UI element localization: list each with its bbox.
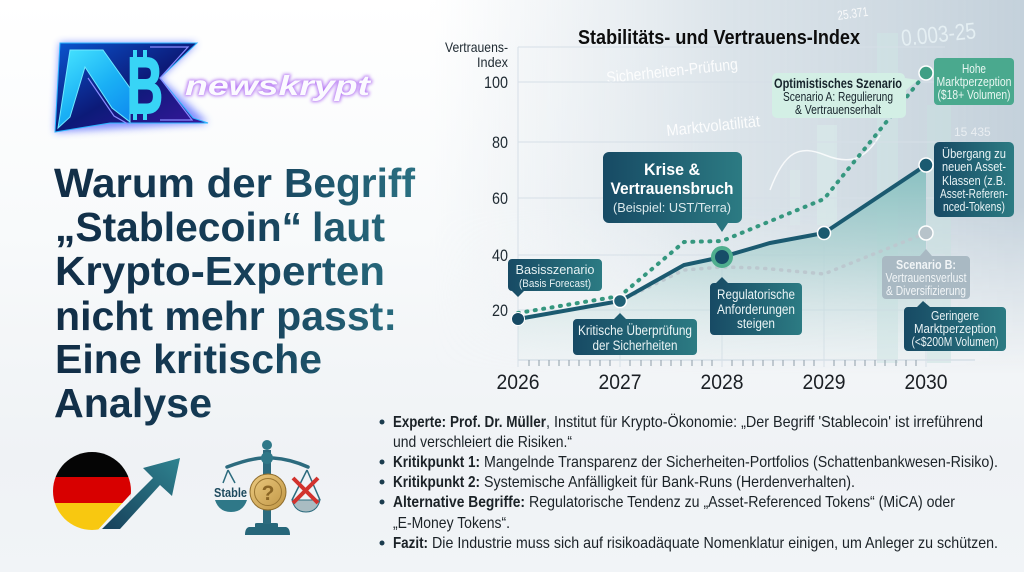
icon: balance scale with Stable and question coin (214, 440, 320, 535)
scenario B gray line (620, 233, 926, 301)
main headline: Analyse (54, 380, 212, 426)
text block: key points: Experte: (393, 414, 446, 431)
background market data decoration (606, 4, 991, 363)
text block: key points (380, 413, 998, 552)
callout: Krise und Vertrauensbruch (603, 152, 742, 232)
callout: Regulatorische Anforderungen: Regulatorische (717, 287, 795, 302)
chart title: Stabilitäts- und Vertrauens-Index (578, 27, 860, 49)
icon: German flag with rising arrow (53, 452, 180, 530)
callout: Geringere Marktperzeption: Geringere (931, 308, 979, 323)
callout: Hohe Marktperzeption (934, 58, 1014, 105)
y axis labels: 20 (492, 301, 508, 320)
y axis labels: 80 (492, 133, 508, 152)
callout: Kritische Überprüfung: der Sicherheiten (592, 338, 678, 353)
x axis years: 2026 (496, 371, 540, 394)
callout: Übergang zu neuen Asset-Klassen: neuen Asset- (942, 159, 1006, 174)
callout: Krise und Vertrauensbruch: Krise & (644, 160, 700, 179)
main headline: Eine kritische (55, 336, 322, 382)
callout: Geringere Marktperzeption: Marktperzeption (914, 321, 996, 336)
main headline: Krypto-Experten (55, 248, 385, 294)
background market data decoration: Sicherheiten-Prüfung (606, 56, 739, 87)
callout: Regulatorische Anforderungen: steigen (737, 316, 775, 331)
callout: Geringere Marktperzeption (904, 301, 1006, 351)
main headline: Warum der (54, 160, 272, 206)
background market data decoration: Marktvolatilität (666, 113, 761, 140)
logo: newskrypt: B (127, 41, 163, 130)
main headline: nicht mehr passt: (55, 293, 397, 339)
callout: Regulatorische Anforderungen: Anforderungen (717, 302, 795, 317)
callout: Optimistisches Szenario: & Vertrauenserhalt (795, 103, 881, 117)
callout: Übergang zu neuen Asset-Klassen: Klassen (z.B. (942, 173, 1006, 188)
callout: Hohe Marktperzeption: ($18+ Volumen) (938, 88, 1010, 102)
main headline: laut (312, 204, 385, 250)
callout: Kritische Überprüfung: Kritische Überprüfung (578, 323, 692, 338)
logo: newskrypt: newskrypt (185, 70, 372, 101)
y axis labels: 100 (484, 73, 508, 92)
x axis years: 2028 (700, 371, 744, 394)
callout: Kritische Überprüfung (573, 313, 697, 355)
callout: Scenario B (882, 249, 970, 299)
callout: Krise und Vertrauensbruch: Vertrauensbruch (610, 179, 734, 198)
callout: Regulatorische Anforderungen (710, 277, 802, 335)
callout: Hohe Marktperzeption: Hohe (962, 62, 986, 76)
text block: key points: Prof. Dr. Müller (450, 414, 546, 431)
background market data decoration: 25.371 (836, 4, 869, 23)
text block: key points: , Institut für Krypto-Ökonomie: „Der Begriff 'Stablecoin' ist irreführend (546, 413, 983, 431)
callout: Basisszenario (508, 259, 602, 297)
text block: key points: Alternative Begriffe: (393, 494, 525, 511)
callout: Optimistisches Szenario: Scenario A: Regulierung (783, 90, 893, 104)
x axis years: 2030 (904, 371, 948, 394)
y axis labels: Index (477, 54, 508, 70)
text block: key points: Fazit: (393, 535, 428, 552)
y axis labels: 40 (492, 246, 508, 265)
optimistic green dotted line (518, 73, 926, 313)
text block: key points: Kritikpunkt 2: (393, 474, 480, 491)
callout: Basisszenario: Basisszenario (516, 262, 594, 277)
callout: Übergang zu neuen Asset-Klassen (934, 142, 1014, 217)
icon: balance scale with Stable and question coin: Stable (214, 485, 247, 500)
icon: balance scale with Stable and question coin: ? (262, 482, 274, 505)
x axis years: 2029 (802, 371, 846, 394)
base forecast solid line (518, 165, 926, 319)
text block: key points: Regulatorische Tendenz zu „Asset-Referenced Tokens“ (MiCA) oder (529, 494, 956, 511)
text block: key points: und verschleiert die Risiken.“ (393, 434, 572, 451)
background market data decoration: 0.003-25 (900, 17, 977, 51)
line chart: stability and trust index (445, 39, 975, 394)
callout: Übergang zu neuen Asset-Klassen: Übergang zu (942, 146, 1006, 161)
data points (512, 66, 933, 326)
callout: Scenario B: Scenario B: (896, 257, 956, 272)
x axis years: 2027 (598, 371, 642, 394)
x axis years (496, 371, 948, 394)
y axis labels: 60 (492, 189, 508, 208)
callout: Scenario B: & Diversifizierung (886, 284, 966, 298)
background market data decoration: 15 435 (954, 125, 991, 139)
logo: newskrypt: newskrypt (185, 70, 372, 101)
text block: key points: „E-Money Tokens“. (393, 515, 510, 532)
text block: key points: Systemische Anfälligkeit für Bank-Runs (Herdenverhalten). (484, 474, 855, 491)
callout: Übergang zu neuen Asset-Klassen: nced-Tokens) (943, 199, 1005, 214)
callout: Optimistisches Szenario (772, 73, 918, 118)
main headline: „Stablecoin“ (55, 204, 302, 250)
callout: Geringere Marktperzeption: (<$200M Volumen) (912, 334, 998, 349)
callout: Hohe Marktperzeption: Marktperzeption (936, 75, 1012, 89)
callout: Optimistisches Szenario: Optimistisches Szenario (774, 76, 902, 91)
main headline (54, 160, 415, 426)
y axis labels: Vertrauens- (445, 39, 508, 55)
callout: Basisszenario: (Basis Forecast) (519, 278, 591, 290)
y axis labels (445, 39, 508, 320)
text block: key points: Kritikpunkt 1: (393, 454, 480, 471)
main headline: Begriff (284, 160, 415, 206)
area under base line (518, 165, 926, 360)
logo: newskrypt (55, 41, 372, 132)
callout: Scenario B: Vertrauensverlust (886, 271, 967, 285)
callout: Krise und Vertrauensbruch: (Beispiel: UST/Terra) (613, 200, 731, 215)
